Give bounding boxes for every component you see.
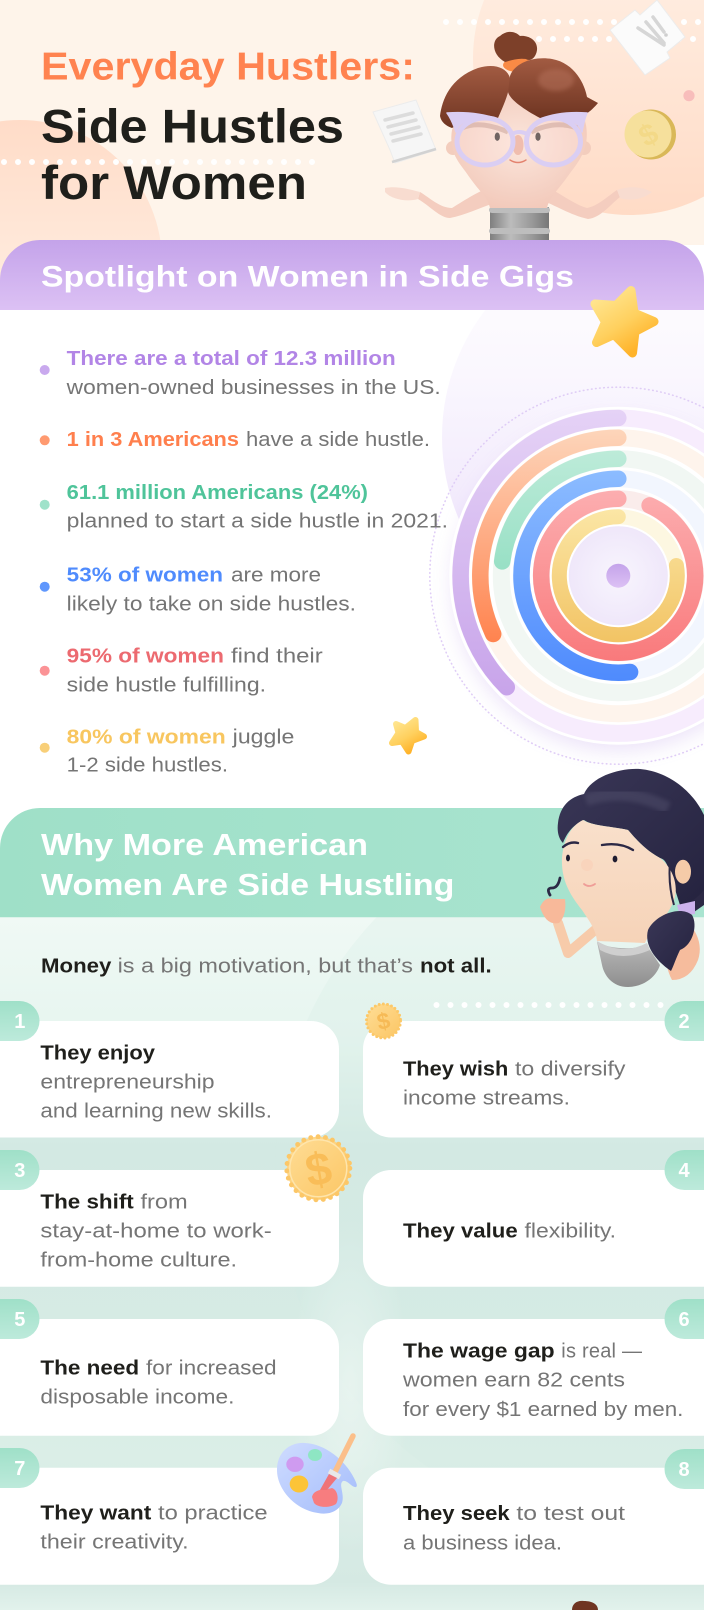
stat: 53%: likely to take on side hustles. (67, 593, 356, 616)
stat: 95%: side hustle fulfilling. (67, 674, 266, 697)
card 6: women earn 82 cents (402, 1370, 625, 1392)
icon: pink dot (683, 90, 695, 101)
stat: 80%: 80% of women (67, 725, 226, 748)
card 4: 4 (678, 1160, 690, 1182)
card 6: The wage gap (403, 1341, 555, 1363)
card 2: income streams. (403, 1087, 570, 1109)
stats list (40, 347, 448, 777)
panel: spotlight header: Spotlight on Women in Side Gigs (41, 261, 574, 294)
card 1: entrepreneurship (40, 1071, 215, 1093)
character: woman with glasses (385, 32, 652, 241)
stat: 1 in 3: 1 in 3 Americans (67, 428, 239, 451)
card 3: 3 (14, 1160, 25, 1182)
card 4: They value (403, 1221, 518, 1243)
card 4 (363, 1150, 704, 1287)
stat: 95% (40, 645, 323, 697)
card 2: 2 (678, 1011, 690, 1033)
title: for Women (41, 156, 307, 209)
card 8: a business idea. (403, 1532, 562, 1554)
card 6: for every $1 earned by men. (403, 1399, 683, 1421)
stat: 53%: 53% of women (67, 564, 223, 587)
card 2 (363, 1001, 704, 1138)
title (41, 45, 415, 209)
card 1: They enjoy (40, 1042, 156, 1064)
stat: 95%: find their (231, 645, 323, 668)
card 6: is real — (561, 1341, 642, 1363)
card 7: to practice (158, 1502, 268, 1524)
card 5: 5 (14, 1309, 25, 1331)
hero background (0, 0, 704, 404)
card 8: 8 (678, 1459, 690, 1481)
card 7: They want (40, 1502, 152, 1524)
icon: large coin (287, 1137, 350, 1200)
stat: 53%: are more (231, 564, 321, 587)
icon: large star (595, 290, 654, 353)
stat: 61.1 million: planned to start a side hustle in 2021. (67, 510, 448, 533)
stat: 12.3 million (40, 347, 441, 399)
card 2: They wish (403, 1059, 508, 1081)
card 3 (0, 1150, 339, 1287)
card 3: from (140, 1191, 188, 1213)
icon: gold coin top (624, 110, 676, 160)
icon: large coin: $ (301, 1141, 336, 1197)
panel: reasons header: Women Are Side Hustling (41, 867, 454, 902)
intro sentence: is a big motivation, but that’s (118, 955, 413, 978)
section background: white spotlight area (0, 310, 704, 519)
card 5: The need (40, 1357, 139, 1379)
card 7 (0, 1448, 339, 1585)
card 6 (363, 1299, 704, 1436)
card 7: their creativity. (40, 1531, 189, 1553)
panel: spotlight header (0, 240, 704, 310)
card 5: disposable income. (40, 1386, 234, 1408)
character: woman with dark hair (540, 769, 704, 987)
intro sentence: Money (41, 955, 112, 978)
intro sentence (41, 955, 492, 978)
stat: 53% (40, 564, 356, 616)
chart: radial progress rings (430, 387, 704, 764)
stat: 61.1 million (40, 481, 448, 533)
icon: floating document top right (610, 0, 685, 75)
card 3: The shift (40, 1191, 134, 1213)
icon: gold coin top: $ (633, 117, 664, 154)
card 3: stay-at-home to work- (40, 1221, 272, 1243)
card 6: 6 (678, 1309, 690, 1331)
stat: 12.3 million: There are a total of 12.3 million (67, 347, 396, 370)
card 8: They seek (403, 1503, 511, 1525)
panel: reasons header: Why More American (41, 827, 368, 862)
stat: 12.3 million: women-owned businesses in the US. (66, 376, 441, 399)
icon: small coin: $ (375, 1007, 393, 1035)
icon: floating document left (373, 100, 436, 163)
card 2: to diversify (515, 1059, 626, 1081)
card 1: and learning new skills. (40, 1100, 272, 1122)
title: Side Hustles (41, 100, 344, 153)
reason cards (0, 1001, 704, 1585)
stat: 80%: juggle (232, 725, 294, 748)
title: Everyday Hustlers: (41, 45, 415, 88)
card 1: 1 (14, 1011, 25, 1033)
stat: 95%: 95% of women (67, 645, 224, 668)
footer character hair (572, 1601, 598, 1610)
card 4: flexibility. (524, 1221, 616, 1243)
card 8 (363, 1449, 704, 1585)
section background: reasons area (0, 805, 704, 1610)
icon: small star (392, 720, 424, 752)
panel: reasons header (0, 808, 704, 917)
intro sentence: not all. (420, 955, 492, 978)
card 3: from-home culture. (40, 1250, 237, 1272)
stat: 1 in 3 (40, 428, 430, 451)
stat: 61.1 million: 61.1 million Americans (24%) (67, 481, 368, 504)
card 7: 7 (14, 1458, 25, 1480)
card 5: for increased (146, 1357, 277, 1379)
stat: 80% (40, 725, 294, 777)
stat: 80%: 1-2 side hustles. (67, 754, 228, 777)
icon: paint palette (277, 1436, 357, 1514)
card 1 (0, 1001, 339, 1138)
card 8: to test out (516, 1503, 626, 1525)
icon: small coin (366, 1004, 400, 1038)
card 5 (0, 1299, 339, 1436)
stat: 1 in 3: have a side hustle. (246, 428, 430, 451)
